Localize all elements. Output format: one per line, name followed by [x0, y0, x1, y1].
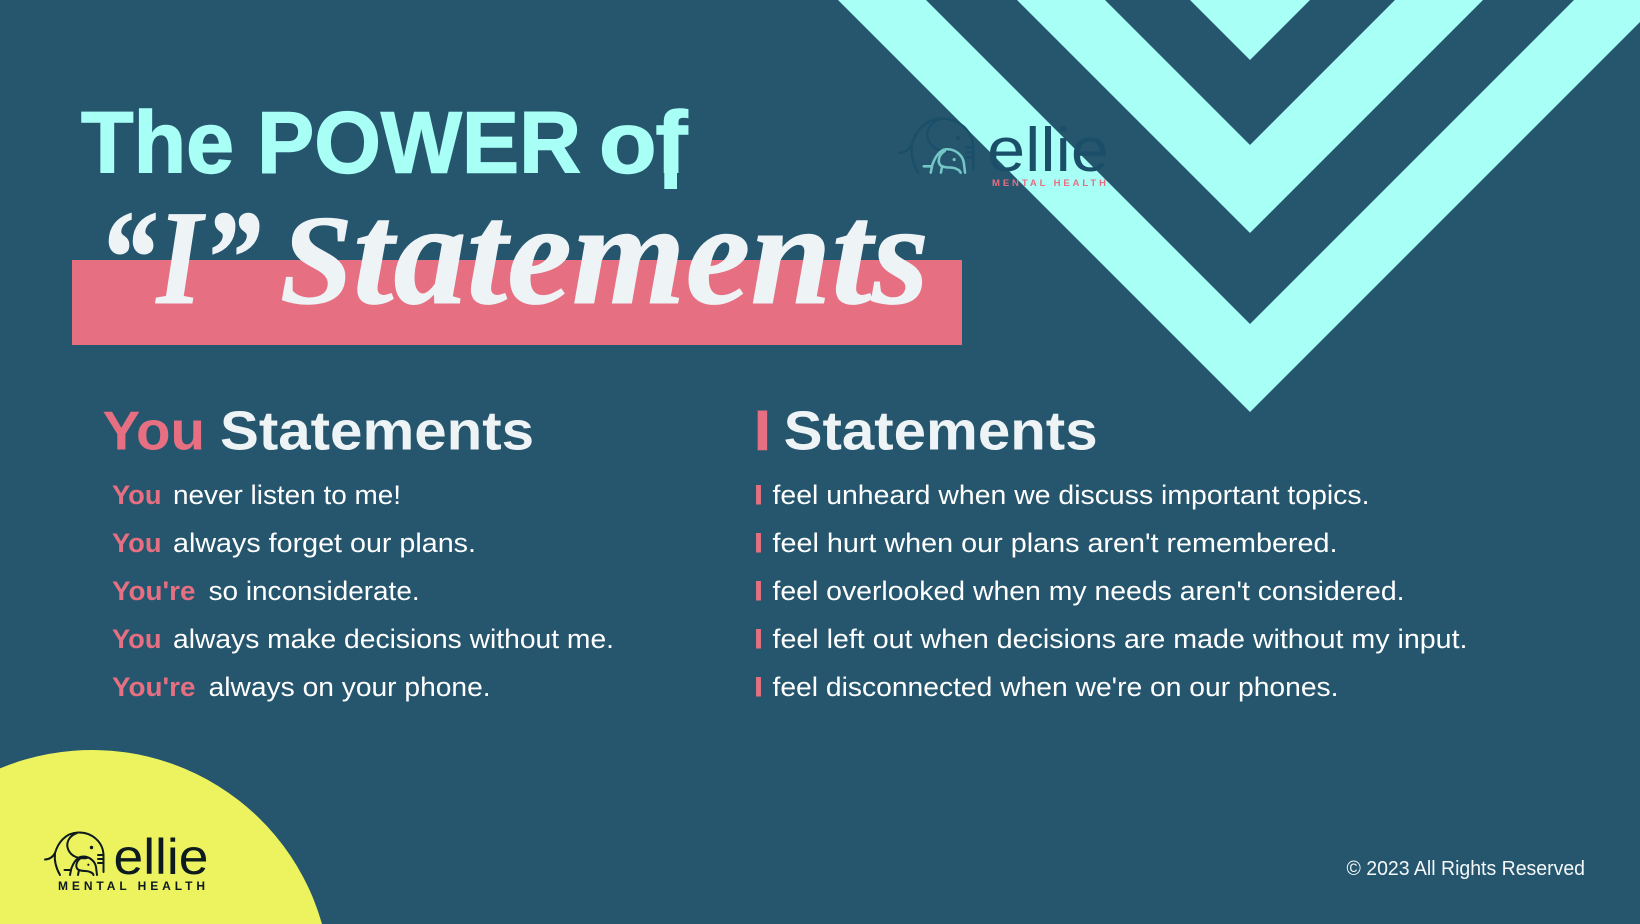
list: i statements: I [755, 672, 762, 702]
list: you statements: never listen to me! [173, 480, 401, 510]
heading: i statements: I [755, 398, 770, 461]
title: "I" Statements: S [280, 189, 353, 331]
heading: you statements: Statements [220, 399, 534, 461]
pink title band [72, 260, 962, 345]
list: you statements: always on your phone. [209, 672, 491, 702]
logo tagline: MENTAL HEALTH [992, 178, 1106, 189]
chevron pattern [838, 0, 1640, 412]
title: "I" Statements: tatements [353, 173, 929, 335]
title: The POWER of [81, 95, 689, 192]
list: i statements [755, 480, 1468, 702]
panel: you statements [102, 399, 614, 702]
list: i statements: feel disconnected when we're on our phones. [772, 672, 1338, 702]
list: i statements: feel left out when decisions are made without my input. [772, 624, 1468, 654]
yellow corner circle [0, 750, 322, 924]
heading: you statements: You [102, 399, 205, 461]
copyright: © 2023 All Rights Reserved [1346, 858, 1585, 880]
title: The POWER of: f [656, 95, 689, 192]
list: i statements: I [755, 624, 762, 654]
title: The POWER of: POWER [257, 95, 581, 192]
list: you statements: always forget our plans. [173, 528, 476, 558]
heading: you statements [102, 399, 534, 461]
logo tagline: MENTAL HEALTH [58, 879, 205, 893]
icon: elephant [899, 119, 973, 173]
icon: elephant [45, 832, 104, 875]
list: you statements: so inconsiderate. [209, 576, 420, 606]
title: "I" Statements: “I” [98, 184, 261, 333]
list: i statements: feel unheard when we discuss important topics. [772, 480, 1370, 510]
list: i statements: I [755, 576, 762, 606]
logo wordmark: ellie [987, 116, 1109, 185]
list: you statements: You [112, 528, 162, 558]
list: you statements: You [112, 624, 162, 654]
list: you statements: You're [112, 576, 196, 606]
logo: ellie top [899, 116, 1109, 189]
title: "I" Statements [98, 173, 929, 335]
logo: ellie bottom [45, 829, 208, 893]
list: you statements: always make decisions without me. [173, 624, 614, 654]
logo wordmark: ellie [114, 829, 208, 885]
panel: i statements [755, 398, 1468, 702]
heading: i statements: Statements [784, 399, 1098, 461]
title: The POWER of: The [81, 95, 234, 192]
list: i statements: feel overlooked when my needs aren't considered. [772, 576, 1404, 606]
list: you statements: You [112, 480, 162, 510]
list: i statements: feel hurt when our plans aren't remembered. [772, 528, 1338, 558]
list: i statements: I [755, 528, 762, 558]
title: The POWER of: o [599, 95, 657, 192]
list: i statements: I [755, 480, 762, 510]
list: you statements [112, 480, 614, 702]
list: you statements: You're [112, 672, 196, 702]
